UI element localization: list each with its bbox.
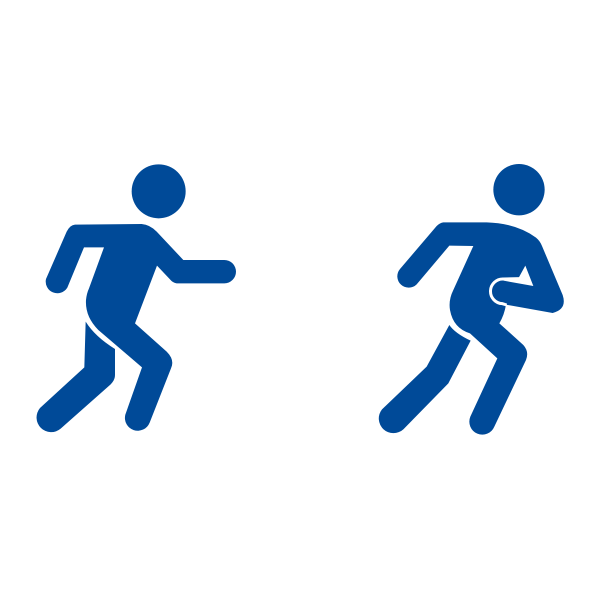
- icon: left running figure: [37, 164, 236, 432]
- left figure head: [132, 164, 186, 218]
- right figure body, arms and front leg: [397, 222, 564, 435]
- left figure body, arms and front leg: [46, 224, 236, 431]
- left figure back leg: [37, 322, 115, 432]
- right figure back leg: [379, 325, 471, 433]
- right figure head: [493, 164, 545, 215]
- icon: right running figure: [379, 164, 564, 435]
- right figure arm gap: [490, 266, 533, 305]
